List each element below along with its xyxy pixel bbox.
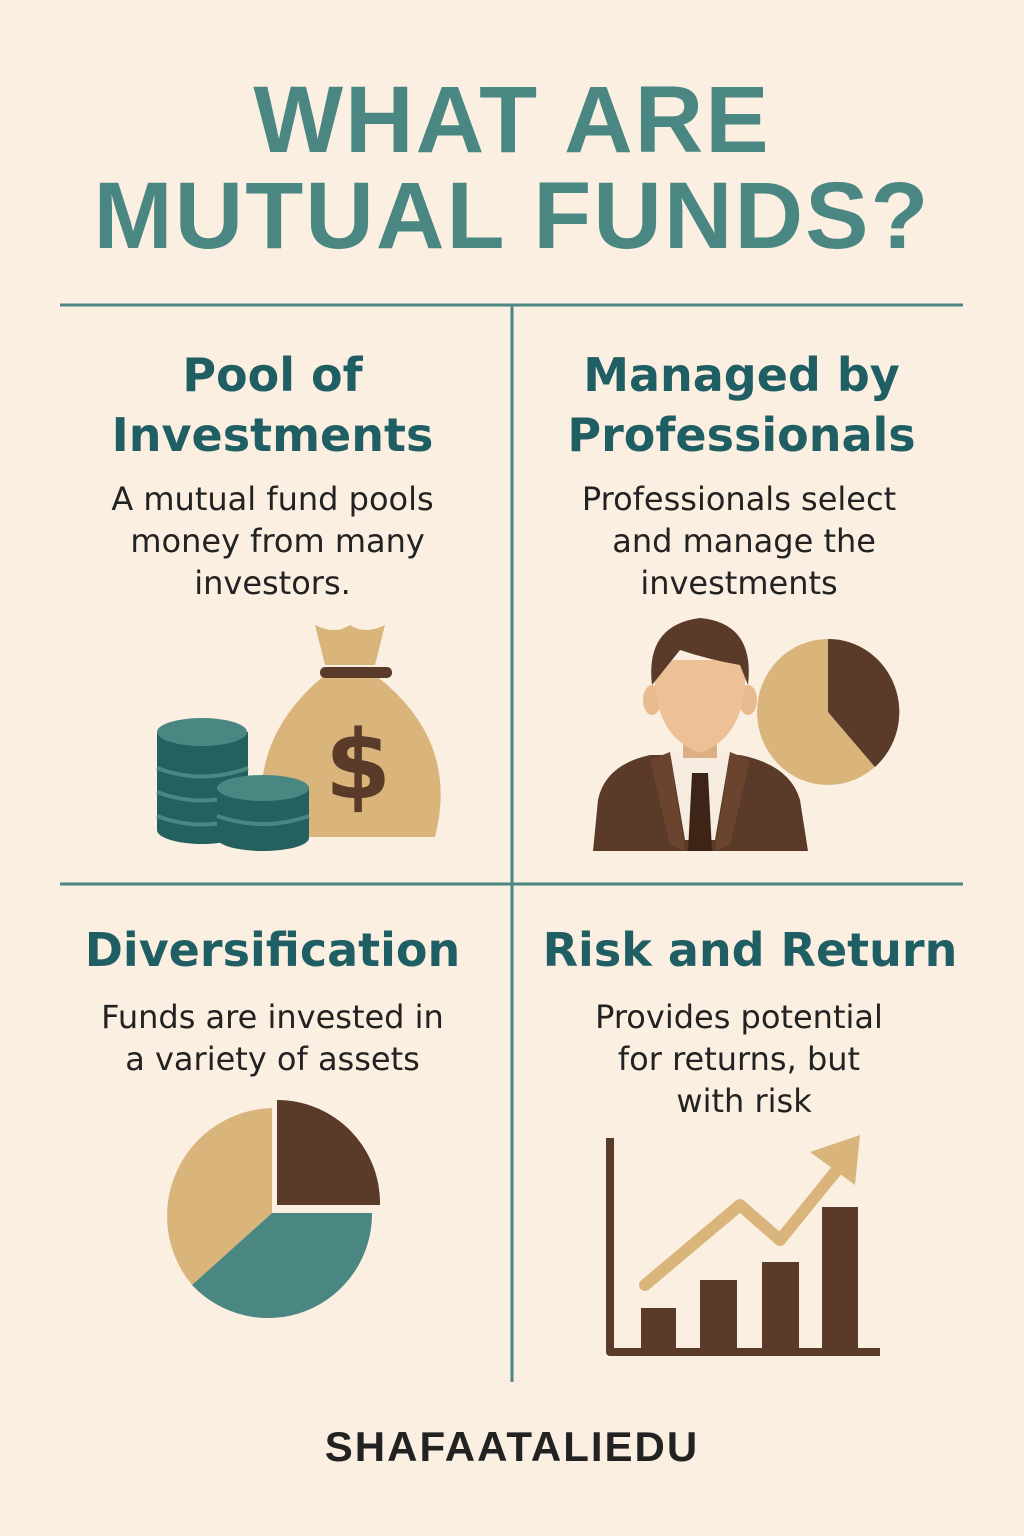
icon: bar chart with arrow [606, 1135, 880, 1356]
heading: diversification: Diversification [85, 923, 460, 977]
panel: pool of investments [111, 348, 434, 602]
heading: managed: Managed by [583, 348, 900, 402]
text: risk: Provides potential [595, 998, 883, 1036]
text: diversification: a variety of assets [125, 1040, 420, 1078]
icon: pie chart [167, 1100, 380, 1318]
icon: professional with pie chart [593, 618, 900, 851]
heading: pool: Pool of [182, 348, 363, 402]
icon: coins and money bag [156, 625, 441, 851]
title: MUTUAL FUNDS? [94, 163, 930, 269]
text: risk: for returns, but [618, 1040, 860, 1078]
text: diversification: Funds are invested in [101, 998, 444, 1036]
title: WHAT ARE [253, 67, 771, 173]
panel: risk and return [543, 923, 957, 1120]
heading: managed: Professionals [567, 408, 916, 462]
text: managed [582, 480, 896, 602]
footer brand: SHAFAATALIEDU [325, 1423, 699, 1470]
heading: risk: Risk and Return [543, 923, 957, 977]
heading: pool: Investments [112, 408, 433, 462]
icon: coins and money bag: $ [325, 711, 391, 821]
text: managed: investments [640, 564, 838, 602]
text: pool: A mutual fund pools [111, 480, 434, 518]
text: risk [595, 998, 883, 1120]
title [94, 67, 930, 269]
panel: diversification [85, 923, 460, 1078]
heading: pool [112, 348, 433, 462]
text: risk: with risk [676, 1082, 812, 1120]
text: pool [111, 480, 434, 602]
text: managed: and manage the [612, 522, 876, 560]
text: pool: money from many [130, 522, 425, 560]
heading: managed [567, 348, 916, 462]
panel: managed by professionals [567, 348, 916, 602]
text: managed: Professionals select [582, 480, 896, 518]
text: diversification [101, 998, 444, 1078]
text: pool: investors. [194, 564, 351, 602]
